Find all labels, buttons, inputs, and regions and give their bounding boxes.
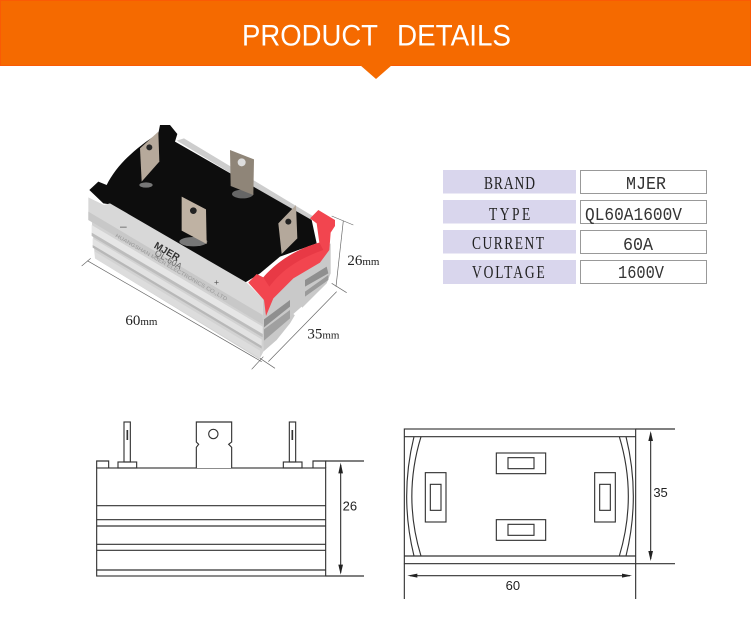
red end cap — [248, 210, 335, 316]
dimension labels: 35mm — [307, 326, 340, 342]
top view technical drawing — [404, 429, 675, 599]
row: type: TYPE — [489, 205, 530, 225]
row: current — [443, 230, 706, 256]
left terminal — [425, 473, 446, 522]
aluminium front face — [88, 197, 263, 325]
black top face — [89, 125, 317, 283]
row: brand: MJER — [626, 175, 666, 195]
front face markings: HUANGSHAN MJER ELECTRONICS CO.,LTD — [114, 233, 228, 303]
row: current: CURRENT — [472, 234, 544, 254]
rectifier body with fin lines — [97, 468, 326, 576]
dimension labels: 26mm — [347, 253, 380, 269]
terminal: rear right — [230, 150, 254, 198]
dimension labels: 60mm — [125, 313, 158, 329]
title: DETAILS — [397, 20, 511, 52]
end tabs — [97, 461, 326, 468]
front face markings: QL-60A — [153, 248, 184, 271]
front face markings: MJER — [152, 240, 181, 264]
right terminal — [283, 422, 302, 468]
dimension 60: 60 — [506, 578, 520, 593]
dimension 60 — [404, 564, 636, 599]
heat sink end profile — [263, 243, 331, 352]
row: voltage: 1600V — [618, 264, 664, 284]
side view technical drawing — [97, 422, 364, 576]
front face markings: + — [214, 277, 219, 287]
front face markings — [114, 227, 228, 303]
top terminal — [496, 453, 546, 474]
rear silver rail — [177, 138, 315, 221]
left terminal — [118, 422, 137, 468]
heat sink fins — [92, 220, 263, 359]
centre terminal — [196, 422, 232, 468]
right terminal — [595, 473, 615, 522]
dimension 26 — [326, 461, 364, 576]
outline with end arcs — [404, 429, 636, 564]
row: voltage: VOLTAGE — [472, 263, 545, 283]
row: brand — [443, 170, 706, 195]
row: type: QL60A1600V — [585, 206, 682, 226]
title: PRODUCT — [242, 20, 378, 52]
specification table — [443, 170, 706, 284]
dimension 35 — [636, 429, 675, 564]
dimension 35: 35 — [653, 485, 668, 500]
dimension lines — [82, 216, 353, 369]
header banner — [0, 0, 751, 79]
bottom terminal — [496, 520, 546, 540]
dimension labels — [125, 253, 380, 342]
row: type — [443, 200, 706, 226]
terminal: right — [278, 205, 297, 254]
dimension 26: 26 — [343, 499, 357, 514]
row: current: 60A — [623, 236, 653, 256]
terminal: front — [179, 197, 207, 246]
row: brand: BRAND — [484, 174, 535, 194]
terminal: rear left — [139, 132, 159, 188]
row: voltage — [443, 260, 706, 284]
product photo: bridge rectifier with heat sink — [82, 125, 380, 369]
